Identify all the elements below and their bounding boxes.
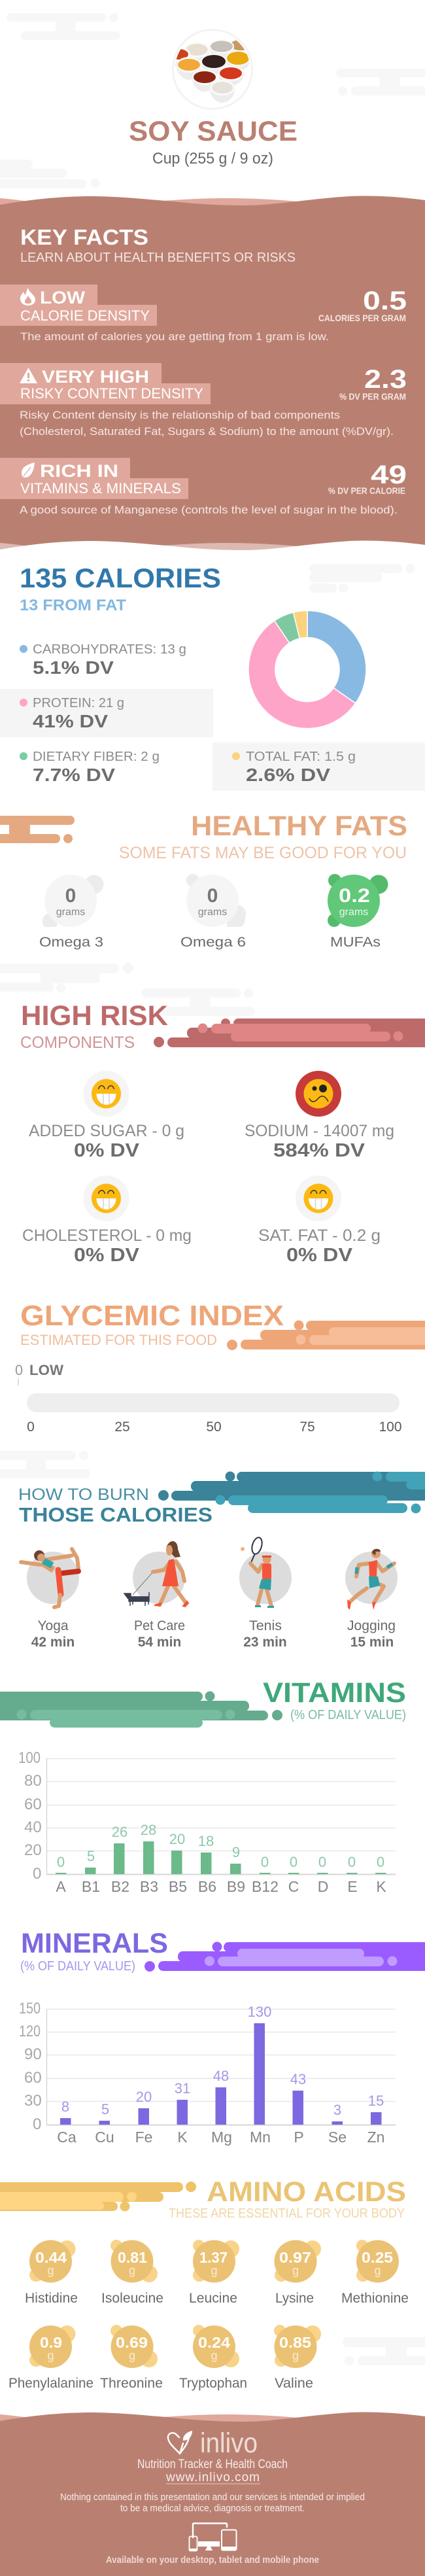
stat: omega 6 — [180, 874, 246, 950]
amino: phenylalanine — [8, 2325, 94, 2391]
bar chart: vitamins: 60 — [24, 1796, 42, 1813]
fact: calorie density — [0, 285, 407, 343]
header decoration — [154, 1018, 425, 1047]
item: added sugar: 0% DV — [74, 1140, 140, 1161]
bar chart: minerals: 60 — [24, 2069, 42, 2087]
amino: threonine: g — [129, 2349, 135, 2362]
fact: calorie density: LOW — [40, 288, 86, 307]
bar chart: minerals: 90 — [24, 2045, 42, 2063]
fact: calorie density: 0.5 — [363, 287, 407, 315]
panel: high risk components — [20, 1000, 425, 1266]
amino: valine: 0.85 — [279, 2334, 311, 2351]
panel: glycemic index — [15, 1300, 425, 1435]
item: sodium — [245, 1071, 394, 1161]
gauge marker: LOW — [29, 1362, 63, 1378]
activity: yoga: 42 min — [31, 1635, 75, 1650]
item: saturated fat: 0% DV — [286, 1245, 353, 1266]
gauge marker — [15, 1362, 63, 1385]
bar chart: vitamins: B6 — [198, 1878, 216, 1895]
bar chart: vitamins: 0 — [33, 1865, 41, 1883]
bar chart: minerals — [19, 2000, 396, 2146]
panel: vitamins — [0, 1677, 406, 1895]
icon: devices — [189, 2524, 237, 2551]
panel: how to burn those calories — [18, 1472, 425, 1650]
activity: pet care — [124, 1541, 188, 1650]
bar chart: minerals: 20 — [136, 2089, 152, 2105]
bar chart: minerals: 8 — [61, 2098, 69, 2115]
bar chart: vitamins: 0 — [57, 1854, 65, 1870]
food photo: bowls of sauce in a circle — [168, 30, 253, 109]
availability note: Available on your desktop, tablet and mobile phone — [106, 2554, 319, 2566]
legend: total fat — [232, 750, 356, 785]
stat: omega 3: Omega 3 — [39, 935, 103, 950]
bar chart: minerals: P — [294, 2129, 304, 2146]
gauge axis labels: 75 — [299, 1419, 315, 1435]
bar chart: vitamins: B2 — [111, 1878, 129, 1895]
amino: histidine — [25, 2240, 78, 2306]
bar chart: minerals: 5 — [101, 2101, 109, 2117]
legend: carbohydrates: CARBOHYDRATES: 13 g — [33, 642, 186, 657]
bar chart: minerals: 31 — [175, 2080, 190, 2097]
icon: flame — [20, 288, 35, 305]
panel: healthy fats — [0, 810, 407, 950]
subheading: (% OF DAILY VALUE) — [20, 1959, 135, 1974]
bar chart: minerals: 48 — [213, 2068, 229, 2084]
bar chart: vitamins: E — [347, 1878, 358, 1895]
header decoration — [0, 1692, 282, 1728]
header decoration — [158, 1472, 425, 1514]
bar chart: vitamins: C — [288, 1878, 299, 1895]
amino: leucine: Leucine — [189, 2291, 237, 2306]
activity: pet care: 54 min — [138, 1635, 181, 1650]
activity: tennis — [239, 1537, 292, 1650]
bar chart: vitamins: 26 — [112, 1824, 128, 1840]
heading: amino acids: AMINO ACIDS — [207, 2176, 406, 2208]
bar chart: minerals: 43 — [290, 2071, 306, 2087]
amino: leucine — [189, 2240, 239, 2306]
bar chart: vitamins: B5 — [169, 1878, 187, 1895]
stat: mufas: MUFAs — [330, 935, 381, 950]
amino: isoleucine: 0.81 — [118, 2249, 147, 2266]
bar chart: vitamins: A — [56, 1878, 66, 1895]
amino: lysine: 0.97 — [279, 2249, 311, 2266]
bar chart: minerals: 3 — [333, 2102, 341, 2118]
bar chart: vitamins: 9 — [232, 1844, 240, 1860]
fact: risky content density: VERY HIGH — [42, 367, 149, 387]
fact: risky content density: 2.3 — [364, 365, 407, 394]
heading: minerals: MINERALS — [21, 1928, 168, 1959]
panel: footer — [0, 2412, 425, 2576]
activity: yoga — [21, 1549, 79, 1650]
amino: tryptophan: 0.24 — [198, 2334, 230, 2351]
serving size: Cup (255 g / 9 oz) — [152, 150, 273, 167]
heading: 135 calories: 135 CALORIES — [20, 563, 221, 593]
amino: methionine — [341, 2240, 409, 2306]
background cloud decorations: mid — [0, 963, 255, 1016]
heading: vitamins: VITAMINS — [263, 1677, 406, 1709]
bar chart: vitamins — [18, 1749, 396, 1895]
bar chart: minerals: 0 — [33, 2115, 41, 2133]
heading: glycemic index: GLYCEMIC INDEX — [20, 1300, 284, 1332]
logo text: inlivo — [200, 2428, 258, 2459]
panel: minerals — [19, 1928, 425, 2146]
gauge track — [27, 1393, 400, 1412]
amino: lysine: Lysine — [275, 2291, 314, 2306]
bar chart: minerals: 130 — [248, 2004, 271, 2020]
stat: mufas: 0.2 — [339, 885, 370, 907]
bar chart: vitamins: 0 — [318, 1854, 326, 1870]
bar chart: minerals: 15 — [368, 2093, 384, 2109]
legend: carbohydrates — [20, 642, 186, 678]
bar chart: vitamins: 20 — [169, 1831, 185, 1847]
amino: tryptophan — [179, 2325, 247, 2391]
amino: leucine: g — [211, 2264, 218, 2277]
item: sodium: 584% DV — [273, 1140, 366, 1161]
legend: carbohydrates: 5.1% DV — [33, 657, 114, 678]
fact: risky content density: % DV PER GRAM — [339, 391, 406, 402]
fact: risky content density: Risky Content density is the relationship of bad components — [20, 409, 340, 421]
stat: mufas: grams — [339, 907, 368, 918]
fact: rich in vitamins and minerals: A good source of Manganese (controls the level of sugar in the blood). — [20, 504, 398, 516]
stat: omega 3: 0 — [65, 885, 76, 907]
amino: threonine: Threonine — [100, 2376, 163, 2391]
heading: how to burn: HOW TO BURN — [18, 1486, 149, 1504]
header decoration — [227, 1320, 425, 1350]
icon: leaf — [22, 462, 35, 478]
bar chart: vitamins: 0 — [348, 1854, 356, 1870]
bar chart: minerals: Ca — [57, 2129, 76, 2146]
gauge axis labels: 50 — [206, 1419, 222, 1435]
gauge marker: 0 — [15, 1362, 23, 1378]
logo: inlivo heart — [168, 2431, 192, 2454]
legend: dietary fiber — [20, 750, 160, 785]
bar chart: minerals: Mn — [250, 2129, 271, 2146]
item: cholesterol: CHOLESTEROL - 0 mg — [22, 1227, 192, 1245]
amino: isoleucine: Isoleucine — [101, 2291, 163, 2306]
panel: calories — [0, 563, 425, 791]
bar chart: vitamins: K — [376, 1878, 386, 1895]
fact: calorie density: CALORIE DENSITY — [20, 307, 150, 324]
fact: rich in vitamins and minerals: 49 — [371, 461, 407, 489]
activity: jogging: 15 min — [350, 1635, 394, 1650]
fact: risky content density — [0, 363, 407, 438]
item: cholesterol — [22, 1175, 192, 1266]
bar chart: vitamins: 0 — [377, 1854, 384, 1870]
stat: omega 6: Omega 6 — [180, 935, 246, 950]
amino: phenylalanine: Phenylalanine — [8, 2376, 94, 2391]
amino: methionine: Methionine — [341, 2291, 409, 2306]
bar chart: vitamins: 20 — [24, 1841, 42, 1859]
amino: isoleucine: g — [129, 2264, 135, 2277]
header decoration — [144, 1941, 425, 1972]
bar chart: minerals: K — [177, 2129, 188, 2146]
fact: rich in vitamins and minerals: VITAMINS & MINERALS — [20, 480, 181, 496]
amino: valine: g — [292, 2349, 299, 2362]
item: cholesterol: 0% DV — [74, 1245, 140, 1266]
disclaimer: Nothing contained in this presentation and our services is intended or implied — [60, 2492, 365, 2503]
heading: high risk: HIGH RISK — [21, 1000, 168, 1032]
donut chart — [248, 610, 366, 729]
icon: warning triangle — [20, 368, 37, 383]
bar chart: vitamins: 18 — [198, 1833, 214, 1849]
fact: calorie density: The amount of calories you are getting from 1 gram is low. — [20, 330, 329, 343]
amino: isoleucine — [101, 2240, 163, 2306]
subheading: components: COMPONENTS — [20, 1034, 135, 1052]
activity: tennis: Tenis — [249, 1618, 282, 1633]
amino: valine: Valine — [275, 2376, 313, 2391]
bar chart: minerals: Zn — [367, 2129, 384, 2146]
heading: healthy fats: HEALTHY FATS — [191, 810, 407, 842]
amino: tryptophan: g — [211, 2349, 218, 2362]
bar chart: minerals: Mg — [211, 2129, 232, 2146]
heading: key facts: KEY FACTS — [20, 225, 148, 249]
bar chart: minerals: Fe — [135, 2129, 152, 2146]
item: sodium: SODIUM - 14007 mg — [245, 1122, 394, 1140]
stat: omega 6: 0 — [207, 885, 218, 907]
activity: tennis: 23 min — [243, 1635, 287, 1650]
gauge axis labels — [27, 1419, 402, 1435]
amino: lysine: g — [292, 2264, 299, 2277]
bar chart: vitamins: 100 — [18, 1749, 41, 1767]
amino: leucine: 1.37 — [199, 2249, 228, 2266]
legend: protein — [20, 696, 124, 731]
fact: calorie density: CALORIES PER GRAM — [318, 313, 406, 323]
bar chart: vitamins: D — [318, 1878, 328, 1895]
panel: key facts — [0, 196, 425, 563]
disclaimer: to be a medical advice, diagnosis or treatment. — [120, 2503, 305, 2514]
bar chart: vitamins: 80 — [24, 1772, 42, 1790]
activity: jogging — [345, 1549, 398, 1650]
activity: yoga: Yoga — [37, 1618, 69, 1633]
bar chart: vitamins: B1 — [82, 1878, 100, 1895]
legend: total fat: TOTAL FAT: 1.5 g — [246, 750, 356, 764]
subheading: ESTIMATED FOR THIS FOOD — [20, 1332, 217, 1348]
legend: protein: PROTEIN: 21 g — [33, 696, 124, 710]
bar chart: vitamins: 0 — [290, 1854, 298, 1870]
amino: phenylalanine: 0.9 — [40, 2334, 62, 2351]
subheading: from fat: 13 FROM FAT — [20, 597, 126, 614]
tagline: Nutrition Tracker & Health Coach — [137, 2458, 288, 2471]
website link: www.inlivo.com — [165, 2471, 260, 2484]
amino: histidine: g — [47, 2264, 54, 2277]
amino: threonine — [100, 2325, 163, 2391]
fact: rich in vitamins and minerals: % DV PER CALORIE — [328, 485, 405, 496]
bar chart: vitamins: 40 — [24, 1819, 42, 1836]
amino: histidine: 0.44 — [35, 2249, 67, 2266]
item: added sugar: ADDED SUGAR - 0 g — [29, 1122, 184, 1140]
bar chart: minerals: 150 — [19, 2000, 41, 2017]
gauge axis labels: 25 — [114, 1419, 130, 1435]
bar chart: vitamins: 5 — [87, 1848, 95, 1864]
fact: rich in vitamins and minerals — [0, 458, 407, 516]
amino: methionine: 0.25 — [362, 2249, 393, 2266]
item: saturated fat: SAT. FAT - 0.2 g — [258, 1227, 381, 1245]
subheading: THESE ARE ESSENTIAL FOR YOUR BODY — [169, 2206, 405, 2221]
header decoration — [0, 2182, 196, 2211]
bar chart: minerals: 120 — [19, 2023, 41, 2040]
amino: histidine: Histidine — [25, 2291, 78, 2306]
title: SOY SAUCE — [129, 116, 298, 147]
legend: dietary fiber: 7.7% DV — [33, 765, 115, 785]
amino: tryptophan: Tryptophan — [179, 2376, 247, 2391]
bar chart: vitamins: 0 — [261, 1854, 269, 1870]
amino: phenylalanine: g — [47, 2349, 54, 2362]
background cloud decorations: header — [0, 13, 425, 188]
background cloud decoration: burn section — [0, 1451, 90, 1478]
fact: rich in vitamins and minerals: RICH IN — [40, 461, 118, 481]
item: saturated fat — [258, 1175, 381, 1266]
bar chart: minerals: Cu — [95, 2129, 114, 2146]
amino: threonine: 0.69 — [116, 2334, 148, 2351]
stat: omega 3: grams — [56, 907, 85, 918]
stat: omega 6: grams — [198, 907, 227, 918]
legend: dietary fiber: DIETARY FIBER: 2 g — [33, 750, 160, 764]
legend: protein: 41% DV — [33, 711, 108, 731]
subheading: (% OF DAILY VALUE) — [290, 1708, 406, 1722]
fact: risky content density: RISKY CONTENT DENSITY — [20, 385, 203, 402]
amino: methionine: g — [374, 2264, 381, 2277]
gauge axis labels: 100 — [379, 1419, 402, 1435]
activity: jogging: Jogging — [347, 1618, 396, 1633]
bar chart: minerals: Se — [328, 2129, 347, 2146]
panel: amino acids — [0, 2176, 425, 2391]
stat: mufas — [328, 874, 388, 950]
bar chart: vitamins: B3 — [140, 1878, 158, 1895]
gauge axis labels: 0 — [27, 1419, 35, 1435]
bar chart: vitamins: B9 — [227, 1878, 245, 1895]
item: added sugar — [29, 1071, 184, 1161]
activity: pet care: Pet Care — [134, 1618, 185, 1633]
fact: risky content density: (Cholesterol, Saturated Fat, Sugars & Sodium) to the amount (%DV/gr). — [20, 425, 394, 438]
disclaimer — [60, 2492, 365, 2514]
heading: those calories: THOSE CALORIES — [19, 1503, 212, 1526]
bar chart: minerals: 30 — [24, 2092, 42, 2110]
header decoration — [0, 816, 75, 843]
legend: total fat: 2.6% DV — [246, 765, 330, 785]
subheading: LEARN ABOUT HEALTH BENEFITS OR RISKS — [20, 251, 296, 265]
subheading: SOME FATS MAY BE GOOD FOR YOU — [119, 844, 407, 862]
bar chart: vitamins: 28 — [141, 1822, 156, 1838]
amino: valine — [274, 2325, 321, 2391]
bar chart: vitamins: B12 — [252, 1878, 279, 1895]
stat: omega 3 — [39, 875, 103, 950]
amino: lysine — [275, 2240, 321, 2306]
